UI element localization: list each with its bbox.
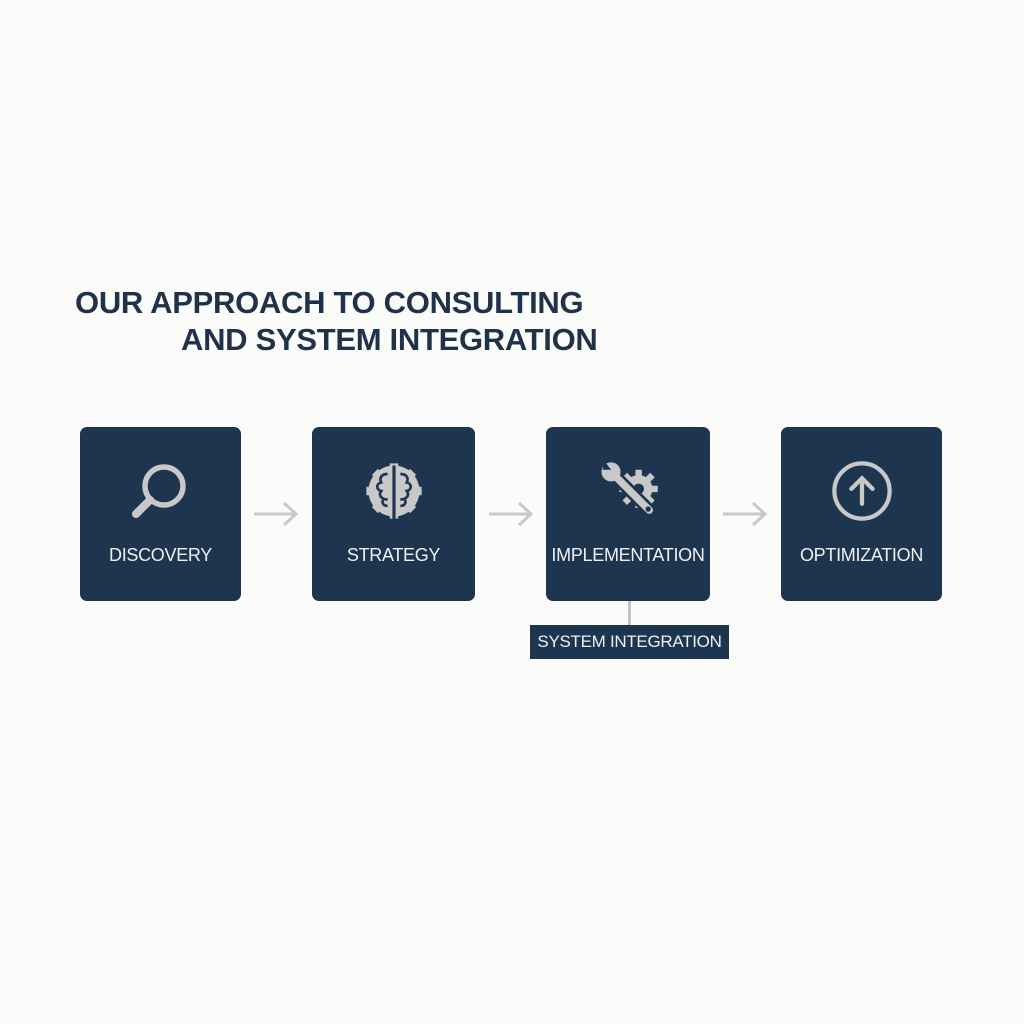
title: OUR APPROACH TO CONSULTING [75,285,583,320]
label: OPTIMIZATION [800,545,923,565]
panel: discovery [80,427,241,601]
icon: up arrow circle [832,461,892,521]
icon: wrench and gear [601,462,658,514]
label: STRATEGY [347,545,440,565]
arrow [254,502,298,526]
connector [628,601,631,625]
arrow [489,502,533,526]
callout: system integration [530,625,729,659]
title: AND SYSTEM INTEGRATION [181,322,598,357]
panel: strategy [312,427,475,601]
arrow [723,502,767,526]
label: DISCOVERY [109,545,212,565]
icon: brain gear [366,463,422,519]
panel: optimization [781,427,942,601]
panel: implementation [546,427,710,601]
label: IMPLEMENTATION [551,545,705,565]
title [75,285,598,357]
callout: system integration: SYSTEM INTEGRATION [537,632,722,651]
icon: magnifier [132,464,186,518]
